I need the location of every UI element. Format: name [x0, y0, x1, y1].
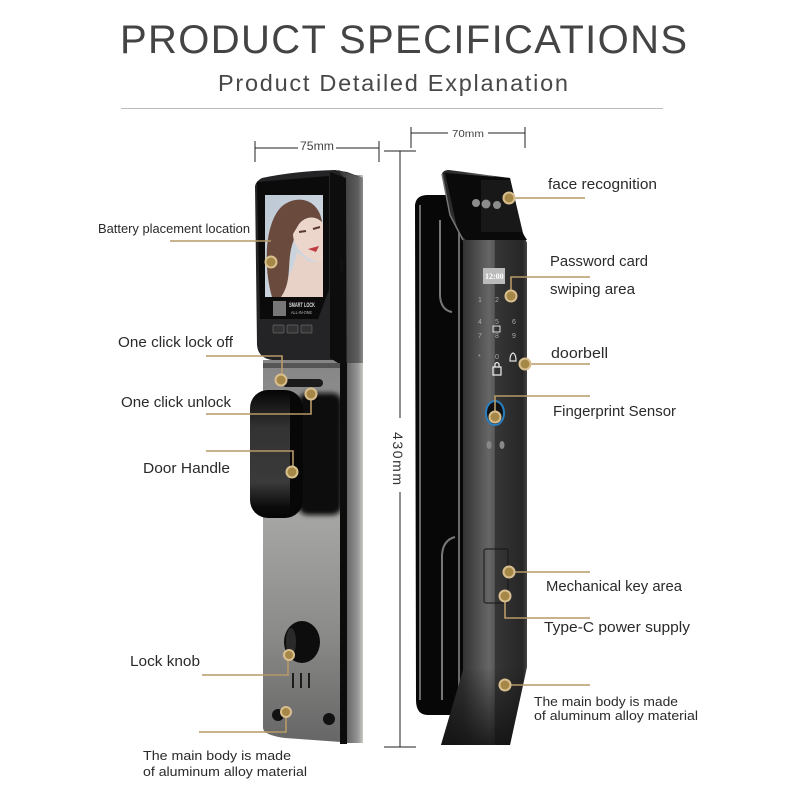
keypad: 8: [495, 333, 499, 340]
screw holes: [272, 709, 284, 721]
label: fingerprint sensor: Fingerprint Sensor: [553, 403, 676, 420]
callout lines: [170, 198, 590, 732]
indicator dots: [486, 441, 504, 449]
QR code and brand: [273, 301, 315, 316]
card icon: [493, 326, 500, 332]
front lock body: [263, 360, 363, 743]
keypad: 7: [478, 333, 482, 340]
label: lock knob: Lock knob: [130, 653, 200, 670]
label: face recognition: face recognition: [548, 176, 657, 193]
vents: [293, 673, 309, 688]
lock knob: [284, 621, 320, 663]
label: side body material: The main body is made: [534, 695, 678, 709]
rear handle: [415, 195, 463, 715]
label: front body material: [143, 749, 307, 779]
keypad: [478, 297, 516, 361]
mechanical key cover: [484, 549, 508, 603]
keypad: 2: [495, 297, 499, 304]
subtitle: Product Detailed Explanation: [218, 70, 568, 96]
clock display: 12:00: [485, 272, 504, 281]
QR code and brand: SMART LOCK: [289, 303, 315, 309]
label: door handle: Door Handle: [143, 460, 230, 477]
dimension: 430mm height: [384, 151, 416, 747]
button strip: [282, 379, 323, 387]
label: password card swiping area: Password card: [550, 253, 648, 270]
side view lock: [415, 170, 527, 745]
label: password card swiping area: [550, 253, 648, 298]
fingerprint ring: [486, 401, 504, 425]
front lock head: [255, 170, 363, 363]
dimension: 70mm width: 70mm: [452, 128, 484, 140]
label: type-c power supply: Type-C power supply: [544, 619, 691, 636]
dimension: 70mm width: [411, 127, 525, 148]
keypad: 6: [512, 319, 516, 326]
label: password card swiping area: swiping area: [550, 281, 636, 298]
front view lock: [250, 170, 363, 744]
keypad: 5: [495, 319, 499, 326]
screen portrait: [265, 195, 323, 297]
side lock body: [441, 170, 527, 745]
label: front body material: of aluminum alloy material: [143, 765, 307, 779]
door handle: [250, 390, 303, 518]
clock display: [483, 268, 505, 284]
label: side body material: [534, 695, 698, 723]
keypad: 1: [478, 297, 482, 304]
callout dots: [266, 192, 530, 717]
camera lenses: [472, 199, 501, 209]
keypad: *: [478, 354, 481, 361]
keypad: 9: [512, 333, 516, 340]
three buttons: [273, 325, 312, 333]
dimension: 430mm height: 430mm: [390, 432, 406, 485]
label: one click unlock: One click unlock: [121, 394, 231, 411]
label: side body material: of aluminum alloy material: [534, 709, 698, 723]
padlock icon: [493, 362, 501, 375]
speaker dots: [340, 259, 343, 271]
label: mechanical key area: Mechanical key area: [546, 578, 683, 595]
label: front body material: The main body is made: [143, 749, 291, 763]
dimension: 75mm width: 75mm: [300, 141, 334, 153]
label: battery placement location: Battery placement location: [98, 222, 250, 236]
dimension: 75mm width: [255, 141, 379, 162]
head glass: [445, 173, 527, 240]
handle shadow: [298, 393, 342, 515]
keypad: 4: [478, 319, 482, 326]
QR code and brand: ALL-IN-ONE: [291, 310, 312, 315]
keypad: 0: [495, 354, 499, 361]
bell icon: [510, 353, 516, 361]
title: PRODUCT SPECIFICATIONS: [120, 18, 687, 62]
label: one click lock off: One click lock off: [118, 334, 234, 351]
label: doorbell: doorbell: [551, 345, 608, 362]
